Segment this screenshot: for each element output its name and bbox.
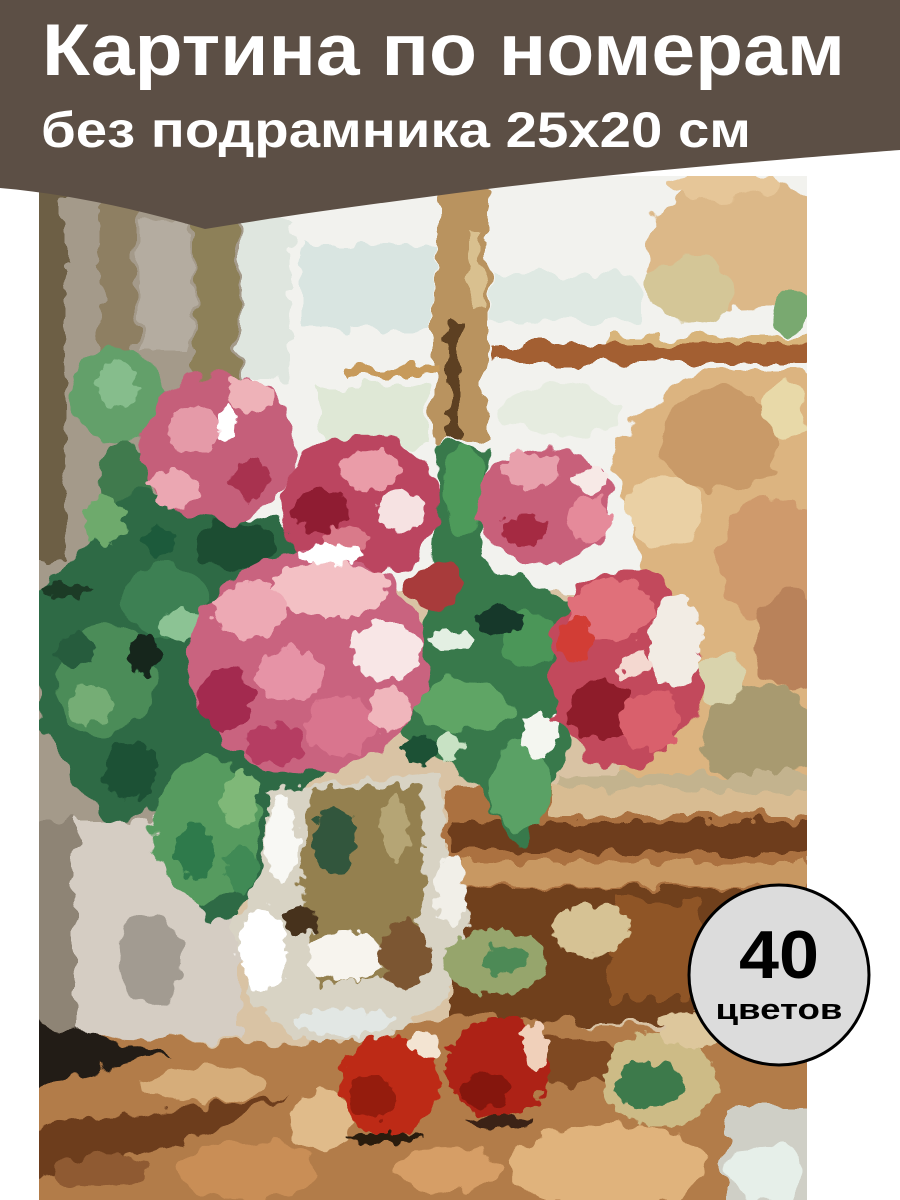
window background bbox=[30, 170, 845, 1200]
window frame horizontal bbox=[490, 344, 820, 362]
painting: hydrangeas in a glass vase by a window bbox=[30, 170, 845, 1200]
badge number: 40 bbox=[739, 917, 819, 993]
hydrangea blossoms bbox=[140, 374, 701, 772]
badge: 40 colours bbox=[689, 885, 869, 1065]
leaf details bbox=[39, 361, 558, 894]
badge label: цветов bbox=[716, 994, 842, 1026]
title: Картина по номерам bbox=[42, 10, 845, 91]
window frame vertical bbox=[436, 190, 488, 440]
right tan garden bbox=[610, 367, 807, 780]
glass vase bbox=[232, 772, 470, 1040]
blossom petal patches bbox=[151, 377, 701, 765]
foliage bbox=[35, 347, 570, 925]
left wall bbox=[30, 180, 240, 1040]
header banner bbox=[0, 0, 900, 229]
table bbox=[30, 1015, 820, 1200]
subtitle: без подрамника 25х20 см bbox=[41, 102, 751, 158]
window sill bbox=[445, 790, 815, 900]
fruit and objects on the table bbox=[340, 904, 722, 1144]
